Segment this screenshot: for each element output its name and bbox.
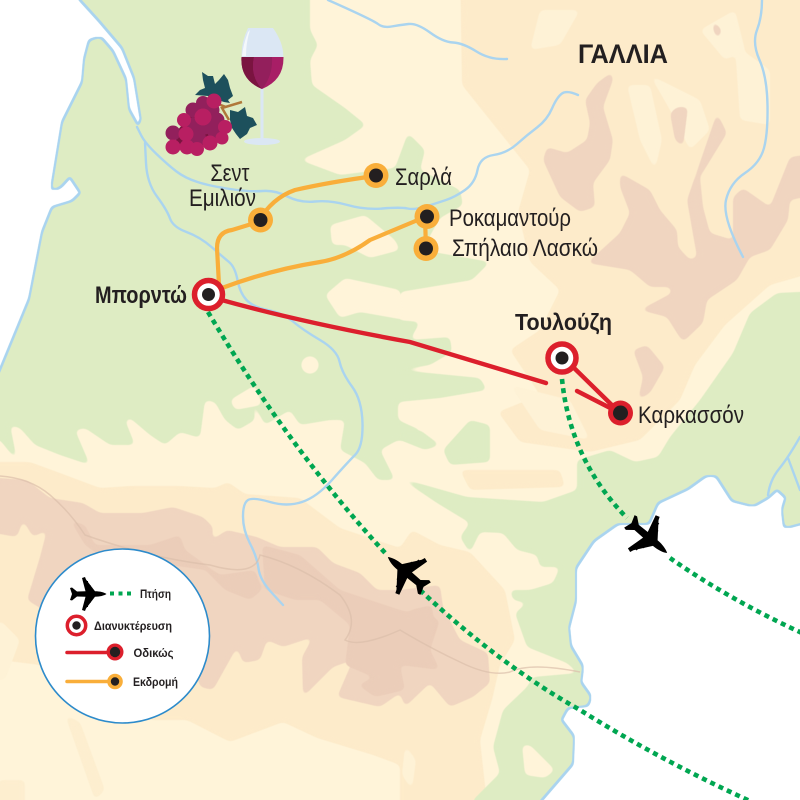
label: Saint-Emilion: Σεντ bbox=[210, 160, 250, 187]
legend panel bbox=[36, 549, 210, 723]
terrain: darker peaks bbox=[70, 520, 440, 697]
legend: excursion bbox=[67, 674, 178, 689]
mountain border line bbox=[0, 476, 580, 673]
icon: airplane Bordeaux bbox=[373, 539, 440, 606]
marker: Rocamadour bbox=[414, 204, 440, 229]
flight path: Bordeaux bbox=[208, 312, 750, 800]
terrain: southeastern lowlands bbox=[400, 290, 800, 800]
label: Bordeaux: Μπορντώ bbox=[95, 282, 187, 309]
label: Toulouse: Τουλούζη bbox=[515, 309, 612, 335]
marker: Toulouse bbox=[548, 344, 576, 372]
marker: Carcassonne bbox=[608, 400, 633, 426]
terrain: faint southern ridges bbox=[0, 715, 105, 800]
marker: Lascaux cave bbox=[414, 236, 438, 261]
label: Sarlat: Σαρλά bbox=[395, 164, 452, 191]
sea: Bay of Biscay bbox=[0, 0, 142, 440]
route: excursions bbox=[217, 176, 426, 288]
flight path: Toulouse bbox=[562, 379, 800, 633]
marker: Bordeaux bbox=[194, 280, 222, 308]
country label: ΓΑΛΛΙΑ bbox=[578, 39, 668, 69]
legend: by road: Οδικώς bbox=[134, 646, 174, 660]
legend: overnight stay bbox=[67, 616, 172, 635]
marker: Saint-Emilion bbox=[248, 208, 273, 232]
legend: by road bbox=[67, 644, 174, 660]
terrain: central highland patches bbox=[230, 215, 405, 410]
label: Saint-Emilion: Εμιλιόν bbox=[189, 185, 256, 212]
sea: Mediterranean bbox=[510, 475, 800, 800]
icon: airplane Toulouse bbox=[615, 504, 682, 571]
route: road bbox=[218, 299, 620, 413]
label: Lascaux cave: Σπήλαιο Λασκώ bbox=[452, 235, 598, 262]
rivers bbox=[137, 0, 800, 605]
terrain: western and central lowlands bbox=[0, 0, 490, 480]
marker: Sarlat bbox=[364, 163, 388, 188]
label: Carcassonne: Καρκασσόν bbox=[638, 402, 744, 429]
legend: flight: Πτήση bbox=[140, 587, 171, 601]
terrain: south cream patches bbox=[522, 745, 555, 778]
icon: grapes bbox=[166, 72, 257, 156]
legend: flight bbox=[70, 577, 171, 611]
icon: wine glass bbox=[241, 28, 284, 145]
legend: overnight stay: Διανυκτέρευση bbox=[94, 619, 172, 633]
legend: excursion: Εκδρομή bbox=[133, 675, 178, 689]
label: Rocamadour: Ροκαμαντούρ bbox=[449, 205, 571, 232]
